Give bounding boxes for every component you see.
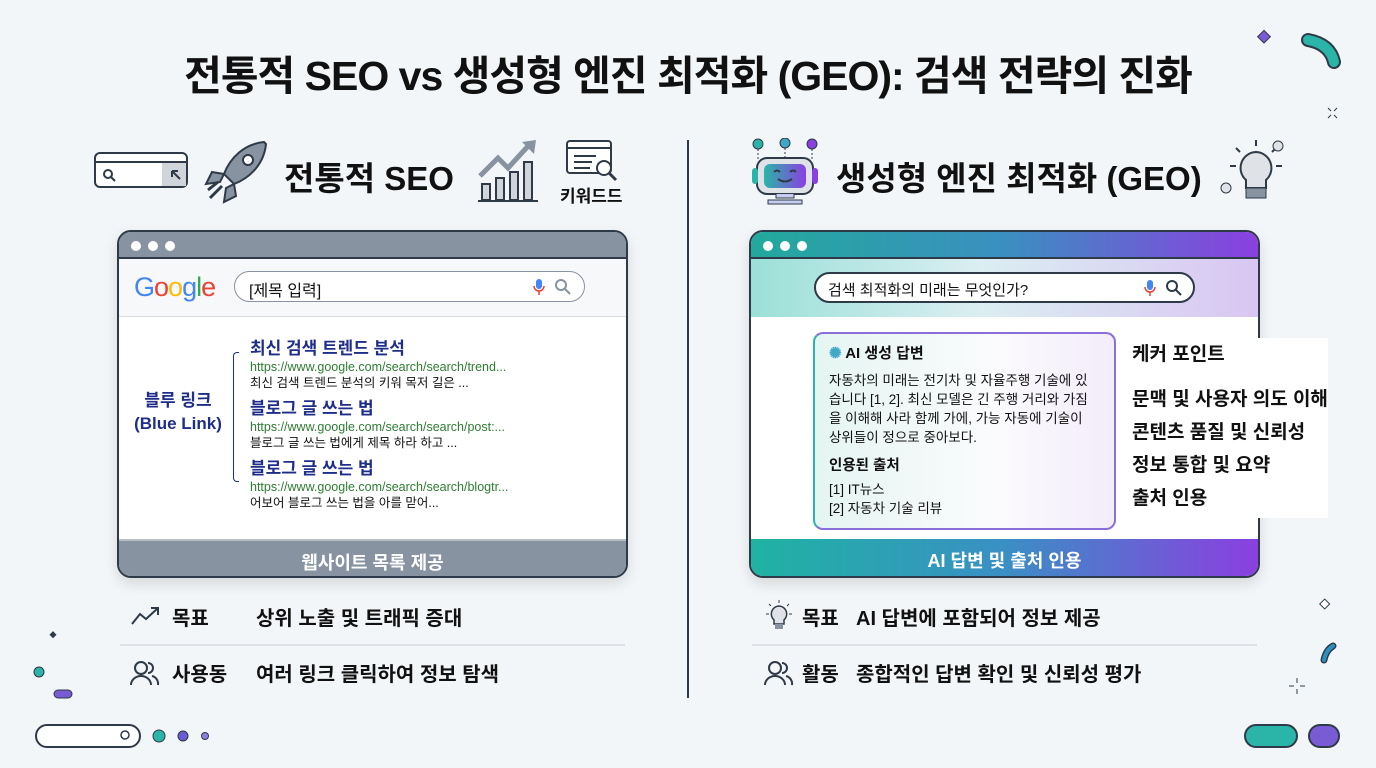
row: activity: 사용동 [172, 664, 227, 686]
blue link label: 블루 링크 [144, 391, 212, 410]
row: activity: 여러 링크 클릭하여 정보 탐색 [256, 664, 499, 686]
blue link results [134, 339, 508, 510]
row: goal [766, 600, 1101, 630]
search box [234, 271, 585, 302]
icon: robot [752, 138, 818, 204]
row: activity [130, 661, 499, 686]
blue link results: https://www.google.com/search/search/post:... [250, 420, 505, 434]
google logo: Google [134, 272, 215, 302]
blue link results: 어보어 블로그 쓰는 법을 아를 맏어... [250, 496, 439, 510]
AI answer card: [1] IT뉴스 [829, 482, 885, 497]
key points list [1128, 338, 1328, 518]
key points list: 케커 포인트 [1132, 344, 1225, 365]
window title bar [119, 232, 626, 259]
panel: GEO browser window [749, 230, 1260, 578]
blue link results: https://www.google.com/search/search/trend... [250, 360, 506, 374]
key points list: 출처 인용 [1132, 488, 1207, 509]
footer bar: AI 답변 및 출처 인용 [928, 551, 1081, 571]
header: traditional SEO [94, 140, 623, 206]
blue link label [134, 391, 222, 433]
header: GEO [752, 138, 1284, 204]
row: activity: 활동 [802, 664, 839, 686]
AI answer card: 인용된 출처 [829, 458, 900, 474]
key points list: 콘텐츠 품질 및 신뢰성 [1132, 422, 1305, 443]
blue link results: 블로그 글 쓰는 법에게 제목 하라 하고 ... [250, 436, 457, 450]
title: 전통적 SEO vs 생성형 엔진 최적화 (GEO): 검색 전략의 진화 [184, 53, 1192, 99]
icon: growth chart [478, 140, 538, 202]
footer bar: 웹사이트 목록 제공 [301, 553, 444, 573]
search box: [제목 입력] [249, 283, 321, 300]
search box: 검색 최적화의 미래는 무엇인가? [828, 282, 1028, 299]
window title bar [751, 232, 1258, 259]
blue link label: (Blue Link) [134, 414, 222, 433]
row: goal: 목표 [802, 608, 839, 630]
row: goal: AI 답변에 포함되어 정보 제공 [856, 608, 1101, 630]
heading: 생성형 엔진 최적화 (GEO) [836, 160, 1202, 197]
blue link results: 블로그 글 쓰는 법 [250, 459, 374, 478]
key points list: 정보 통합 및 요약 [1132, 455, 1270, 476]
row: goal: 목표 [172, 608, 209, 630]
footer bar [751, 539, 1258, 578]
panel: traditional SEO browser window [117, 230, 628, 578]
icon: keyword: 키워드드 [560, 187, 623, 206]
row: goal: 상위 노출 및 트래픽 증대 [256, 608, 462, 630]
AI answer card: [2] 자동차 기술 리뷰 [829, 501, 942, 516]
divider [687, 140, 689, 698]
search box [814, 272, 1195, 303]
search header [751, 259, 1258, 317]
key points list: 문맥 및 사용자 의도 이해 [1132, 389, 1328, 410]
row: goal [131, 607, 462, 630]
AI answer card: 자동차의 미래는 전기차 및 자율주행 기술에 있습니다 [1, 2]. 최신 모델은 긴 주행 거리와 가짐을 이해해 사라 함께 가에, 가능 자동에 기술이 상위들이 정으로 중아보다. [829, 373, 1088, 445]
footer bar [119, 539, 626, 578]
icon: light bulb [1220, 140, 1284, 198]
icon: rocket [204, 141, 267, 204]
heading: 전통적 SEO [284, 160, 454, 197]
blue link results: https://www.google.com/search/search/blogtr... [250, 480, 508, 494]
row: activity: 종합적인 답변 확인 및 신뢰성 평가 [856, 664, 1141, 686]
blue link results: 최신 검색 트렌드 분석의 키워 목저 길은 ... [250, 376, 469, 390]
bottom rows: GEO [752, 600, 1257, 686]
search header [119, 259, 626, 317]
AI answer card: ✺ AI 생성 답변 [829, 345, 924, 362]
AI answer card [813, 332, 1116, 530]
row: activity [764, 661, 1141, 686]
blue link results: 최신 검색 트렌드 분석 [250, 339, 405, 358]
bottom rows: SEO [120, 607, 625, 686]
icon: keyword [560, 140, 623, 206]
blue link results: 블로그 글 쓰는 법 [250, 399, 374, 418]
icon: browser search [94, 152, 188, 188]
